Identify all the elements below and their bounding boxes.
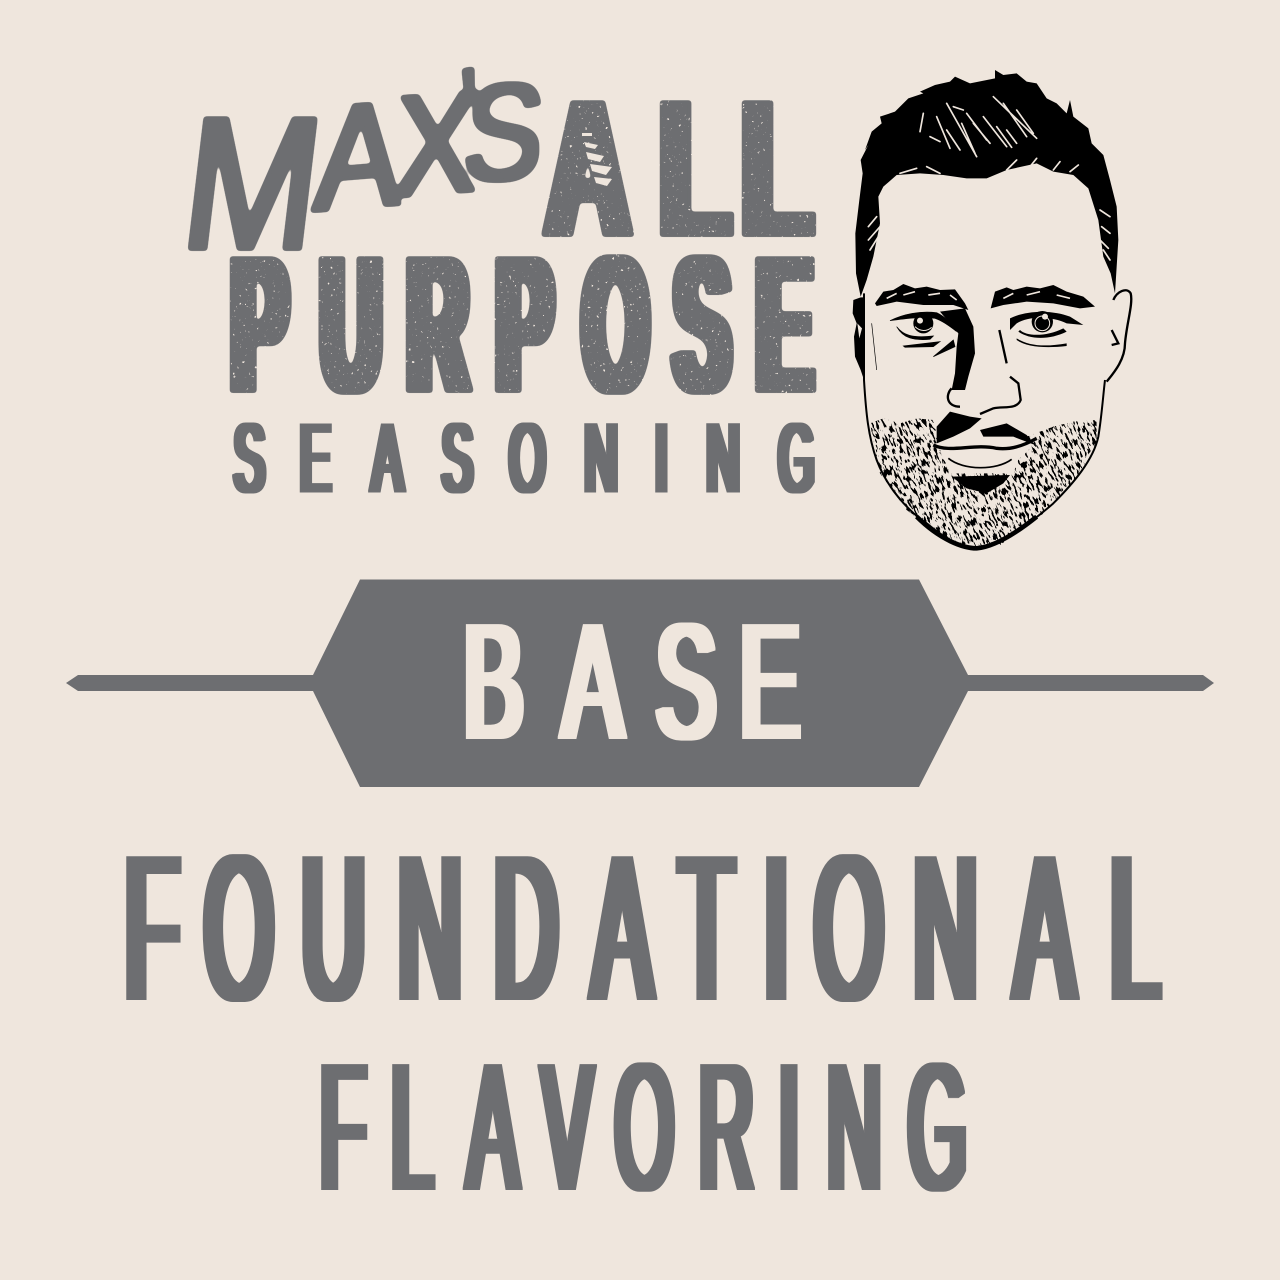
logo: Max's All Purpose Seasoning	[173, 49, 814, 513]
logo script: MAX'S: S	[452, 54, 556, 212]
banner: BASE	[66, 580, 1214, 787]
eyebrows	[875, 284, 1095, 310]
logo script: MAX'S: M	[173, 77, 333, 290]
logo script: MAX'S: A	[301, 68, 417, 243]
heading: FLAVORING: FLAVORING	[320, 1027, 967, 1228]
logo word: ALL: ALL	[546, 60, 812, 276]
portrait: Max's face	[852, 70, 1132, 551]
logo word: SEASONING: SEASONING	[234, 405, 814, 513]
right ear	[1107, 290, 1131, 382]
hair	[855, 70, 1118, 297]
heading: FOUNDATIONAL: FOUNDATIONAL	[125, 812, 1160, 1043]
logo script: MAX'S: X	[381, 60, 492, 228]
beard texture	[870, 418, 1097, 546]
right eye	[1010, 312, 1083, 347]
mouth and moustache	[935, 439, 1035, 472]
face outline	[864, 293, 1105, 548]
banner shape with side rules	[66, 580, 1214, 787]
left eye	[872, 312, 957, 370]
banner label: BASE	[463, 591, 800, 774]
logo word: PURPOSE: PURPOSE	[232, 218, 812, 433]
logo script: MAX'S	[173, 49, 556, 290]
logo script: MAX'S: '	[448, 49, 492, 151]
hair highlights	[868, 97, 1110, 260]
nose	[940, 308, 975, 390]
left ear	[853, 297, 864, 380]
